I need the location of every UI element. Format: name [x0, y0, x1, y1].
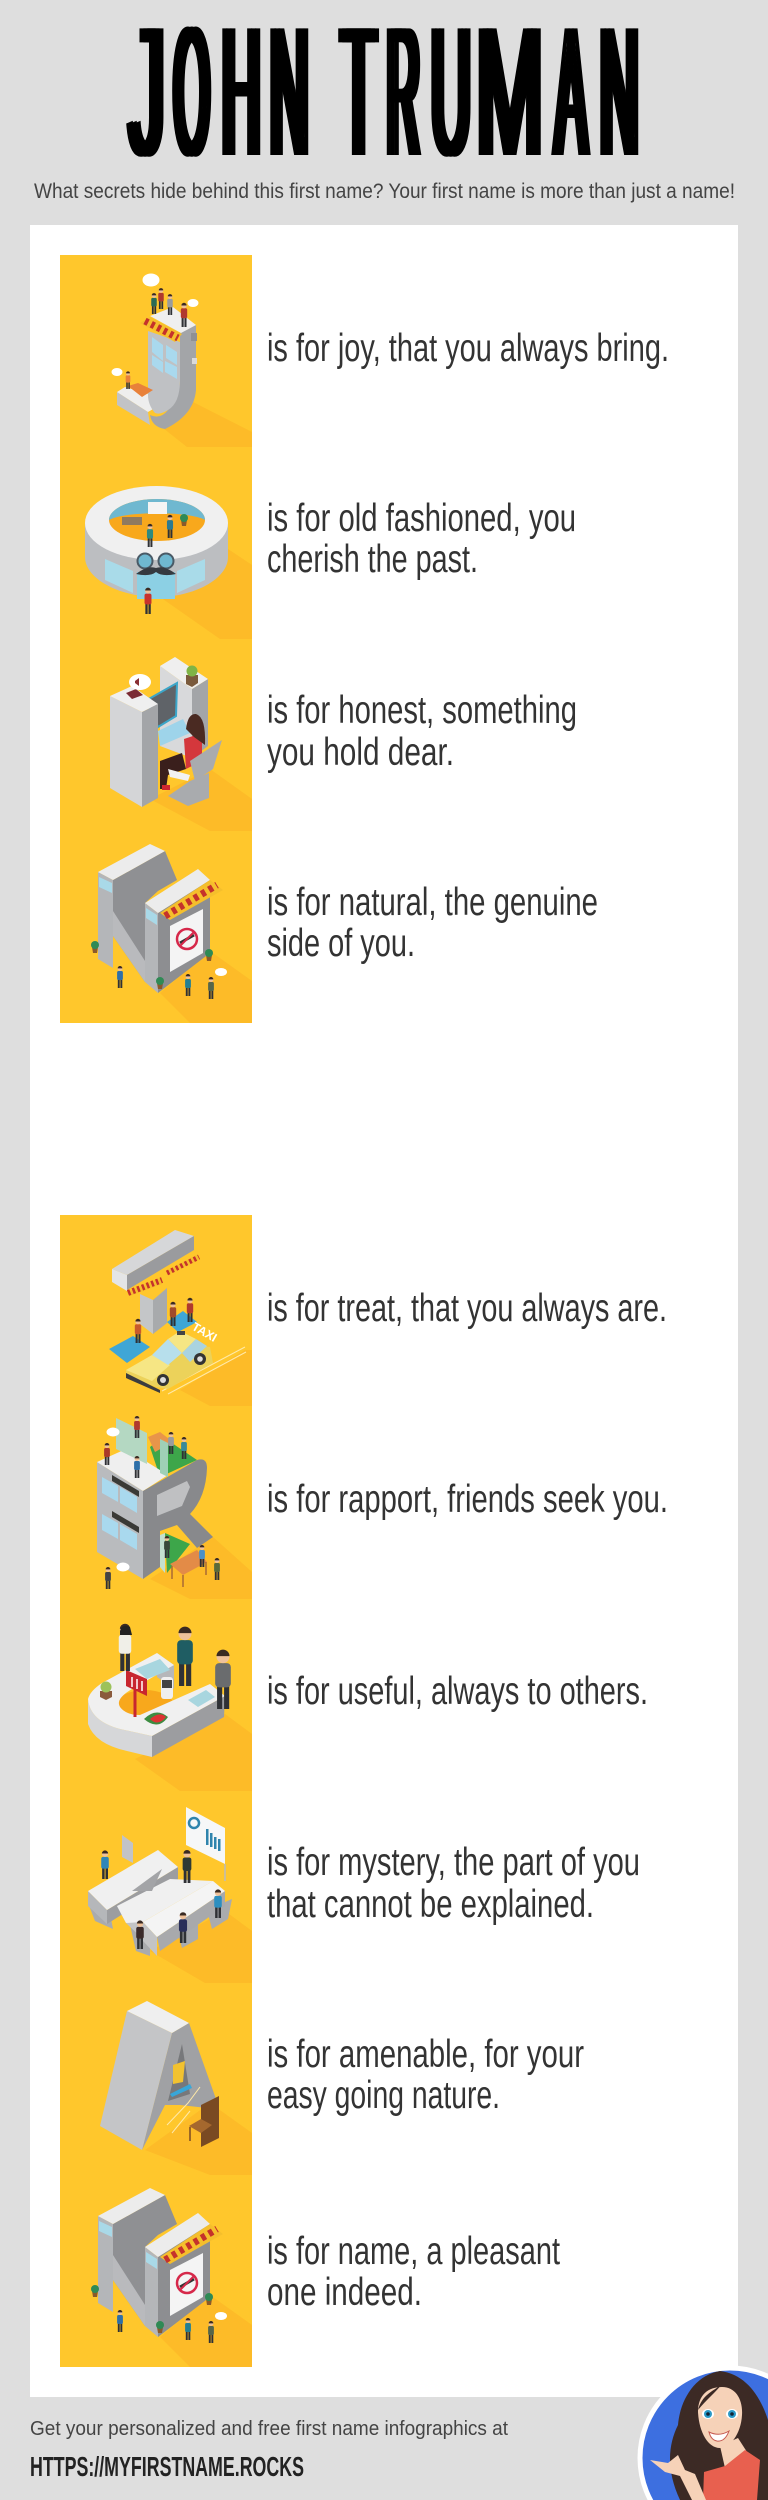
text: H: you hold dear. [267, 731, 454, 774]
illustration: letter A [60, 1983, 252, 2175]
illustration: letter O ring building [60, 447, 252, 639]
text: O: is for old fashioned, you [267, 497, 576, 540]
text: O: cherish the past. [267, 538, 478, 581]
text: second N: is for name, a pleasant [267, 2230, 560, 2273]
taxi lettering: TAXI [190, 1319, 219, 1345]
illustration: letter N shop repeat [60, 2175, 252, 2367]
text: second N [267, 2230, 560, 2314]
text: O [267, 497, 576, 581]
text: A: is for amenable, for your [267, 2033, 584, 2076]
text: A: easy going nature. [267, 2074, 500, 2117]
illustration: letter J building [60, 255, 252, 447]
illustration: letter N shop [60, 831, 252, 1023]
text: M [267, 1841, 640, 1926]
text: M: that cannot be explained. [267, 1883, 594, 1926]
text: H [267, 689, 577, 774]
text: H: is for honest, something [267, 689, 577, 732]
text: A [267, 2033, 584, 2117]
text: N: is for natural, the genuine [267, 881, 598, 924]
illustration: letter M meeting table [60, 1791, 252, 1983]
illustration: letter U counter [60, 1599, 252, 1791]
footer call to action: Get your personalized and free first name infographics at [30, 2418, 508, 2440]
text: U: is for useful, always to others. [267, 1670, 648, 1713]
icon: woman avatar [640, 2368, 768, 2500]
footer url: HTTPS://MYFIRSTNAME.ROCKS [30, 2451, 304, 2482]
illustration: letter H desk [60, 639, 252, 831]
illustration: letter R office [60, 1407, 252, 1599]
text: N [267, 881, 598, 965]
title [126, 0, 638, 194]
text: M: is for mystery, the part of you [267, 1841, 640, 1884]
illustration: letter T taxi [60, 1215, 252, 1407]
text: N: side of you. [267, 922, 415, 965]
text: second N: one indeed. [267, 2271, 422, 2314]
